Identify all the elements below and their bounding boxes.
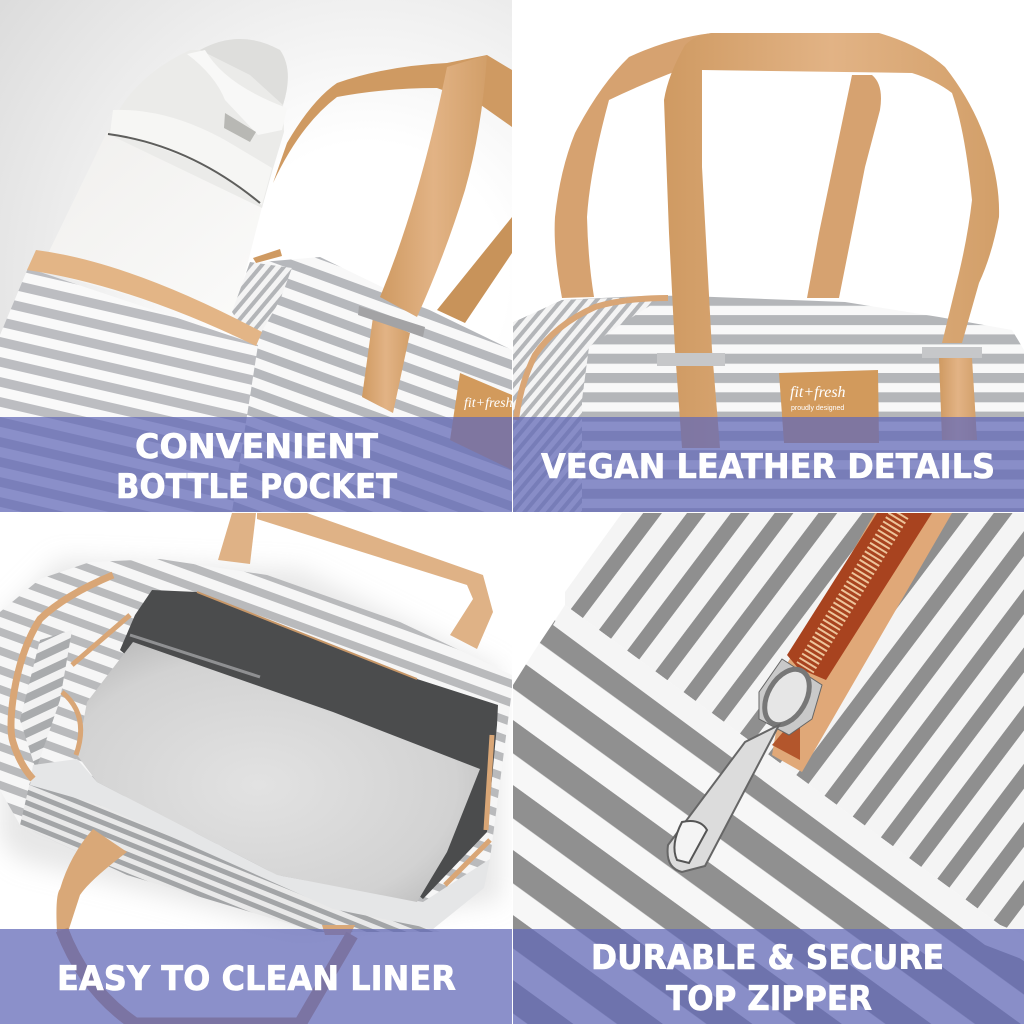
icon: water bottle: [50, 39, 288, 260]
label patch: [450, 373, 512, 470]
dark liner: [120, 590, 498, 899]
panel: clean liner: [0, 513, 512, 1024]
label patch: [779, 370, 879, 443]
zipper: [772, 513, 952, 772]
inner flap stripes: [20, 630, 72, 770]
caption band: clean liner: EASY TO CLEAN LINER: [57, 959, 456, 999]
lower pocket stripes: [513, 605, 1024, 1024]
near handle strap: [380, 55, 487, 317]
top handle: [218, 513, 493, 649]
zipper tape: [11, 575, 113, 779]
bag body with stripes: [512, 295, 1024, 512]
caption band: vegan leather: VEGAN LEATHER DETAILS: [541, 447, 995, 487]
inner zipper line: [130, 635, 260, 677]
far handle: [273, 55, 512, 183]
caption band: zipper: [513, 929, 1024, 1024]
side pinstripes: [20, 782, 440, 932]
zipper pull: [668, 659, 822, 872]
panel: bottle pocket: fit+fresh: [464, 396, 513, 411]
metal buckle: [358, 306, 425, 337]
front rim: [30, 759, 490, 929]
panel: top zipper: [513, 513, 1024, 1024]
bag rim: [0, 559, 512, 930]
panel: bottle pocket: [0, 0, 513, 512]
caption band: bottle pocket: [0, 417, 512, 512]
caption band: bottle pocket: BOTTLE POCKET: [116, 467, 398, 507]
caption band: zipper: TOP ZIPPER: [666, 979, 872, 1019]
front handle: [56, 829, 127, 935]
caption band: zipper: DURABLE & SECURE: [591, 938, 944, 978]
bag body with stripes: [225, 257, 512, 512]
label patch: fit+fresh: [790, 384, 846, 401]
caption band: clean liner: [0, 929, 512, 1024]
soft shadow: [0, 560, 500, 930]
panel: vegan leather handles: [512, 0, 1024, 512]
upper stripes: [565, 513, 1024, 935]
front handle: [664, 33, 999, 448]
back handle: [555, 33, 881, 298]
label patch: proudly designed: [791, 405, 844, 412]
caption band: bottle pocket: CONVENIENT: [135, 427, 379, 467]
white hem: [553, 605, 1024, 960]
bottle pocket: [0, 268, 258, 512]
caption band: vegan leather: [513, 417, 1024, 512]
silver pillow: [77, 642, 480, 902]
metal loops: [657, 353, 725, 366]
